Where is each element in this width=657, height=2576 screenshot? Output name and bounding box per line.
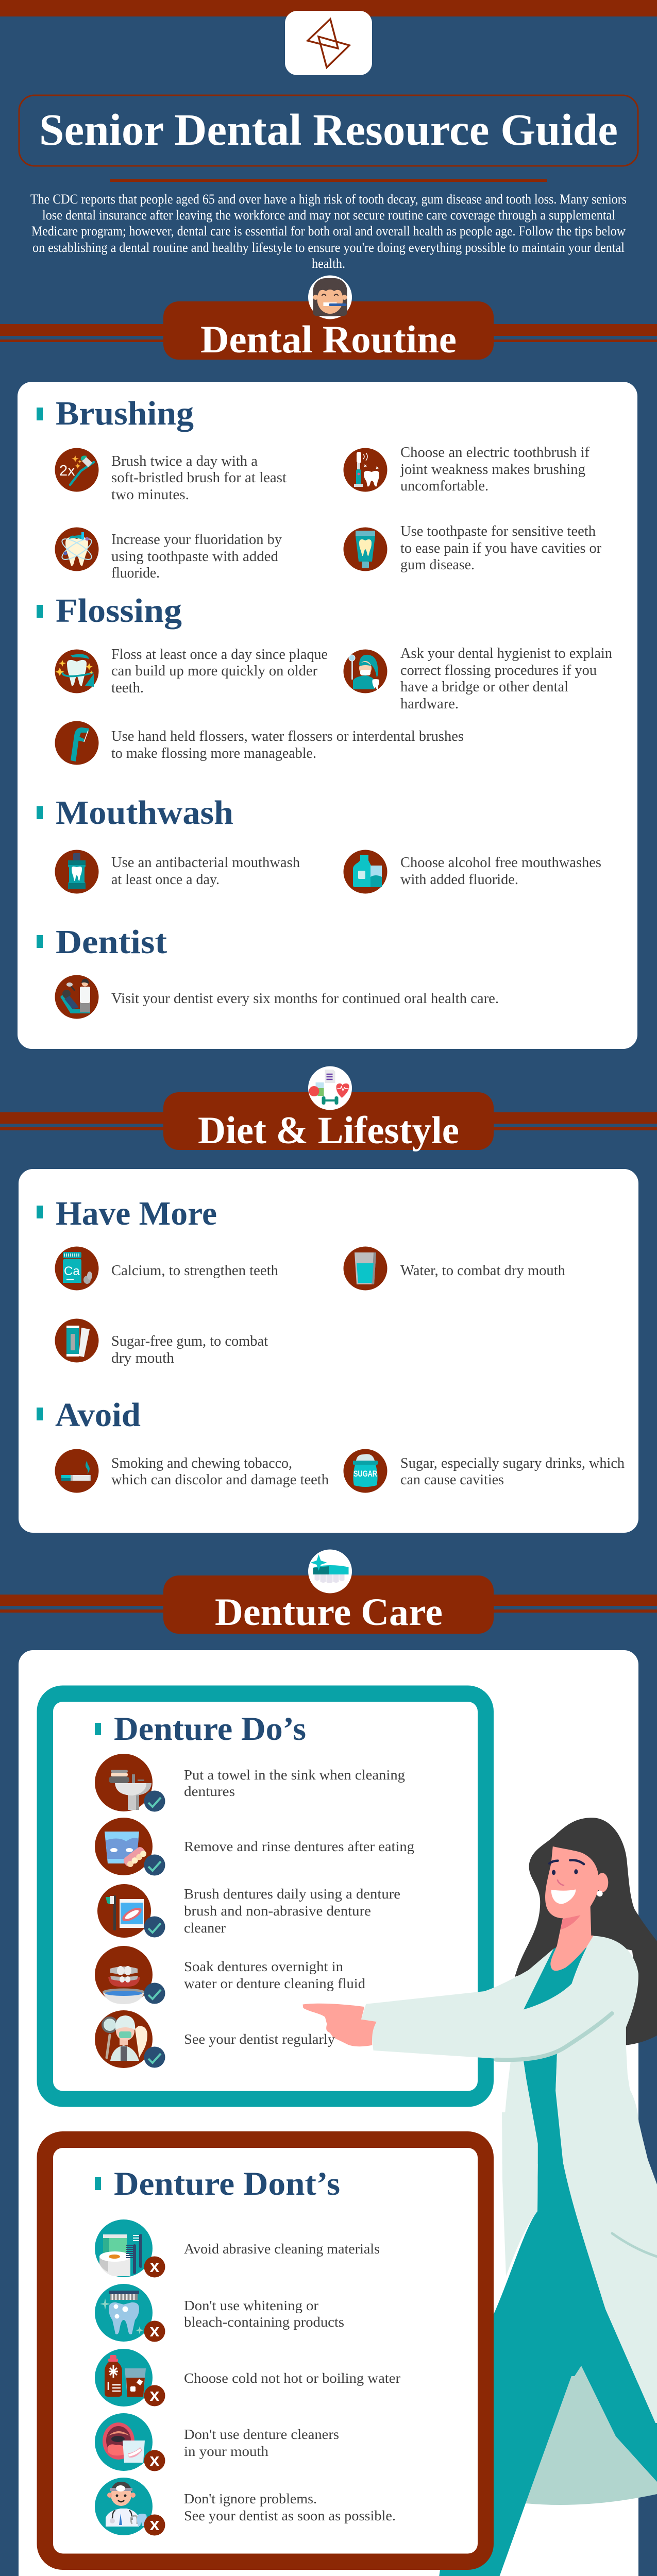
heading: Avoid: Avoid bbox=[55, 1396, 141, 1434]
don't: hot water bbox=[95, 2349, 400, 2406]
tip: sensitive toothpaste: gum disease. bbox=[400, 557, 475, 573]
tip: tobacco: which can discolor and damage teeth bbox=[111, 1472, 329, 1488]
tip: fluoride toothpaste bbox=[55, 528, 282, 581]
don't: ignore problems bbox=[95, 2478, 396, 2536]
x badge: x bbox=[150, 2257, 160, 2276]
do: soak overnight: water or denture cleaning fluid bbox=[184, 1976, 366, 1991]
do: remove and rinse bbox=[95, 1818, 414, 1875]
check badge bbox=[144, 1791, 165, 1811]
banner: Dental Routine: Dental Routine bbox=[200, 318, 457, 361]
logo badge bbox=[285, 11, 372, 75]
tip: sugar: Sugar, especially sugary drinks, which bbox=[400, 1455, 625, 1471]
inner dress strip bbox=[524, 2053, 563, 2164]
do: towel in sink: dentures bbox=[184, 1784, 235, 1799]
tip: floss daily: Floss at least once a day since plaque bbox=[111, 647, 328, 663]
heading: Have More: Have More bbox=[56, 1195, 217, 1232]
tip: fluoride toothpaste: fluoride. bbox=[111, 565, 160, 581]
title box bbox=[19, 95, 638, 166]
don't: cleaners in mouth bbox=[95, 2413, 339, 2471]
x badge bbox=[144, 2514, 165, 2536]
don't: cleaners in mouth: in your mouth bbox=[184, 2444, 269, 2459]
heading: Mouthwash: Mouthwash bbox=[56, 794, 233, 832]
heading: Denture Dont's: Denture Dont’s bbox=[114, 2165, 340, 2202]
tip: alcohol free mouthwash bbox=[343, 850, 601, 893]
tip: visit dentist: Visit your dentist every six months for continued oral health care. bbox=[111, 991, 499, 1007]
do: see dentist icon bbox=[95, 2010, 165, 2068]
don't: cleaners in mouth: Don't use denture cleaners bbox=[184, 2427, 339, 2442]
illustration: dental professional pointing bbox=[303, 1818, 657, 2576]
tip: sugar-free gum: dry mouth bbox=[111, 1350, 174, 1366]
x badge: x bbox=[150, 2515, 160, 2534]
don't: abrasive materials: Avoid abrasive cleaning materials bbox=[184, 2241, 380, 2257]
tip: brush twice bbox=[55, 448, 287, 503]
banner: Denture Care: Denture Care bbox=[215, 1591, 443, 1634]
tip: electric toothbrush: Choose an electric toothbrush if bbox=[400, 445, 590, 461]
tip: tobacco: Smoking and chewing tobacco, bbox=[111, 1455, 292, 1471]
intro text bbox=[30, 192, 627, 271]
neck bbox=[550, 1906, 594, 1971]
heading: Denture Do's: Denture Do’s bbox=[114, 1710, 306, 1748]
tip: fluoride toothpaste: Increase your fluoridation by bbox=[111, 532, 282, 548]
tip: floss daily: can build up more quickly on older bbox=[111, 663, 318, 679]
do: remove and rinse: Remove and rinse dentures after eating bbox=[184, 1839, 414, 1854]
tip: electric toothbrush bbox=[343, 445, 590, 494]
panel: diet and lifestyle bbox=[19, 1169, 638, 1533]
x badge: x bbox=[150, 2450, 160, 2470]
do: brush dentures: cleaner bbox=[184, 1920, 226, 1936]
hand bbox=[303, 2004, 377, 2046]
tip: sugar-free gum bbox=[55, 1319, 268, 1366]
panel: denture don'ts bbox=[37, 2131, 494, 2570]
do: towel in sink: Put a towel in the sink when cleaning bbox=[184, 1767, 405, 1783]
x badge bbox=[144, 2385, 165, 2406]
banner: Diet & Lifestyle: Diet & Lifestyle bbox=[198, 1109, 459, 1152]
panel: denture care bbox=[19, 1650, 638, 2576]
tip: fluoride toothpaste: using toothpaste with added bbox=[111, 549, 278, 565]
do: towel in sink bbox=[95, 1754, 405, 1811]
don't: whitening products: bleach-containing products bbox=[184, 2314, 344, 2330]
banner: Denture Care bbox=[0, 1575, 657, 1634]
x badge: x bbox=[150, 2321, 160, 2341]
tip: sugar: SUGAR bbox=[353, 1469, 377, 1479]
heading: Dentist: Dentist bbox=[56, 923, 167, 961]
tip: water: Water, to combat dry mouth bbox=[400, 1263, 565, 1279]
top band bbox=[0, 0, 657, 16]
tip: water bbox=[343, 1247, 565, 1290]
teal dress bbox=[427, 2053, 657, 2576]
do text: see dentist: See your dentist regularly bbox=[184, 2031, 335, 2047]
features bbox=[549, 1860, 584, 1864]
tip: floss daily: teeth. bbox=[111, 680, 144, 696]
x badge bbox=[144, 2450, 165, 2471]
do: brush dentures: Brush dentures daily using a denture bbox=[184, 1886, 400, 1902]
heading: Flossing: Flossing bbox=[56, 592, 182, 630]
tip: flossers: Use hand held flossers, water flossers or interdental brushes bbox=[111, 728, 464, 744]
tip: dental hygienist: correct flossing procedures if you bbox=[400, 663, 597, 679]
panel: denture do's bbox=[37, 1686, 494, 2107]
title box: Senior Dental Resource Guide bbox=[39, 105, 618, 155]
do: soak overnight bbox=[95, 1946, 366, 2004]
tip: flossers: to make flossing more manageable. bbox=[111, 745, 316, 761]
tip: antibacterial mouthwash: at least once a day. bbox=[111, 872, 220, 888]
check badge bbox=[144, 1982, 165, 2004]
don't: abrasive materials bbox=[95, 2219, 380, 2277]
panel: dental routine bbox=[18, 382, 637, 1049]
tip: electric toothbrush: joint weakness makes brushing bbox=[400, 462, 585, 478]
tip: antibacterial mouthwash: Use an antibacterial mouthwash bbox=[111, 855, 300, 871]
tip: visit dentist bbox=[55, 975, 499, 1019]
tip: calcium bbox=[55, 1247, 278, 1290]
tip: sugar-free gum: Sugar-free gum, to combat bbox=[111, 1333, 268, 1349]
heading: Brushing: Brushing bbox=[56, 395, 194, 432]
tip: sugar: can cause cavities bbox=[400, 1472, 504, 1488]
skirt bbox=[526, 2366, 657, 2505]
don't: whitening products: Don't use whitening or bbox=[184, 2298, 318, 2313]
intro text: lose dental insurance after leaving the workforce and may not secure routine care coverage through a supplemental bbox=[42, 208, 615, 223]
coat lower right bbox=[559, 2112, 657, 2423]
tip: brush twice: soft-bristled brush for at least bbox=[111, 470, 287, 486]
x badge bbox=[144, 2257, 165, 2277]
tip: sensitive toothpaste bbox=[343, 523, 602, 573]
icon: denture bbox=[308, 1550, 352, 1593]
banner: Diet & Lifestyle bbox=[0, 1092, 657, 1152]
tip: electric toothbrush: uncomfortable. bbox=[400, 478, 488, 494]
x badge bbox=[144, 2320, 165, 2342]
tip: dental hygienist: hardware. bbox=[400, 696, 459, 712]
don't: whitening products bbox=[95, 2284, 344, 2342]
banner: Dental Routine bbox=[0, 301, 657, 361]
check badge bbox=[144, 2046, 165, 2068]
tip: tobacco bbox=[55, 1449, 329, 1493]
tip: dental hygienist: have a bridge or other dental bbox=[400, 679, 568, 695]
ear bbox=[596, 1873, 608, 1892]
icon: person brushing teeth bbox=[308, 275, 352, 319]
coat and arm bbox=[361, 1936, 648, 2164]
tip: alcohol free mouthwash: with added fluoride. bbox=[400, 872, 518, 888]
tip: brush twice: 2x bbox=[59, 463, 75, 479]
hair bbox=[515, 1818, 657, 2045]
check badge bbox=[144, 1917, 165, 1937]
coat lower left bbox=[502, 2112, 538, 2276]
tip: alcohol free mouthwash: Choose alcohol free mouthwashes bbox=[400, 855, 601, 871]
tip: calcium: Ca bbox=[64, 1264, 80, 1278]
tip: floss daily bbox=[55, 647, 328, 696]
don't: ignore problems: See your dentist as soon as possible. bbox=[184, 2508, 396, 2523]
neck shadow bbox=[561, 1915, 580, 1930]
do: soak overnight: Soak dentures overnight in bbox=[184, 1959, 344, 1974]
tip: dental hygienist bbox=[343, 646, 612, 712]
tip: brush twice: Brush twice a day with a bbox=[111, 453, 258, 469]
don't: hot water: Choose cold not hot or boiling water bbox=[184, 2370, 400, 2386]
intro text: on establishing a dental routine and healthy lifestyle to ensure you're doing everything possible to maintain your dental bbox=[32, 240, 625, 255]
tip: calcium: Calcium, to strengthen teeth bbox=[111, 1263, 278, 1279]
earring bbox=[597, 1891, 603, 1896]
intro text: health. bbox=[312, 256, 345, 271]
tip: sensitive toothpaste: to ease pain if you have cavities or bbox=[400, 540, 602, 556]
tip: sugar bbox=[343, 1449, 625, 1493]
x badge: x bbox=[150, 2385, 160, 2405]
do: brush dentures: brush and non-abrasive denture bbox=[184, 1903, 371, 1919]
upper figure bbox=[303, 1846, 648, 2164]
tip: sensitive toothpaste: Use toothpaste for sensitive teeth bbox=[400, 523, 596, 539]
don't: ignore problems: Don't ignore problems. bbox=[184, 2491, 317, 2506]
tip: antibacterial mouthwash bbox=[55, 850, 300, 893]
tip: flossers bbox=[55, 721, 464, 765]
shirt bbox=[524, 1941, 586, 2009]
check badge bbox=[144, 1855, 165, 1875]
tip: brush twice: two minutes. bbox=[111, 487, 189, 503]
tip: dental hygienist: Ask your dental hygienist to explain bbox=[400, 646, 612, 662]
smile bbox=[551, 1889, 576, 1904]
face bbox=[545, 1846, 600, 1918]
icon: diet and lifestyle bbox=[308, 1066, 352, 1110]
coat seam bbox=[612, 2233, 657, 2257]
sleeve seam bbox=[496, 2013, 612, 2060]
do: brush dentures bbox=[97, 1884, 400, 1938]
